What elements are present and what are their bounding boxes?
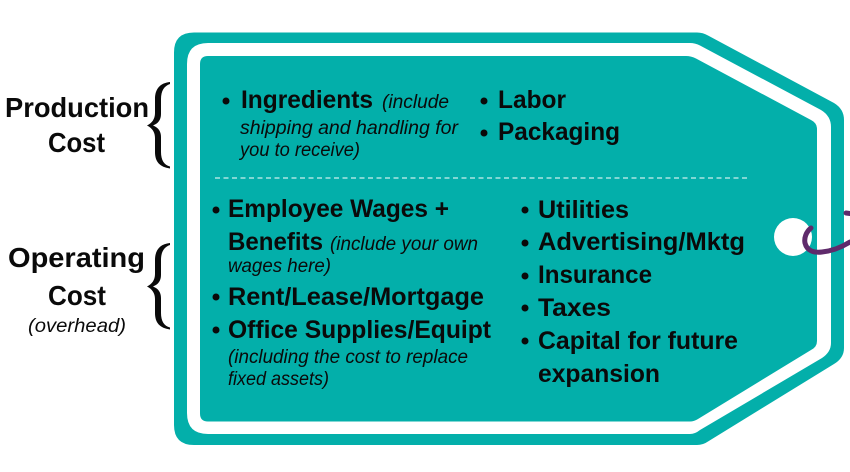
- operating cost list: left column: Office Supplies/Equipt: [228, 316, 492, 344]
- purple string: [805, 213, 850, 252]
- operating cost list: left column: Employee Wages +: [228, 195, 449, 223]
- operating cost list: left column: (include your own: [330, 234, 478, 255]
- operating cost list: left column: Benefits: [228, 228, 323, 256]
- heading: operating cost: Operating: [8, 242, 145, 273]
- operating cost list: left column: wages here): [228, 256, 331, 277]
- heading: operating cost: [8, 242, 145, 337]
- operating cost list: right column: Advertising/Mktg: [538, 228, 745, 256]
- heading: operating cost: Cost: [48, 280, 106, 311]
- heading: production cost: [5, 92, 149, 158]
- brace: production cost: [147, 82, 170, 168]
- heading: production cost: Production: [5, 92, 149, 123]
- operating cost list: right column: Taxes: [538, 294, 611, 322]
- operating cost list: right column: Insurance: [538, 261, 652, 289]
- production cost list: left column: (include: [382, 92, 449, 113]
- heading: production cost: Cost: [48, 127, 105, 158]
- operating cost list: right column: Capital for future: [538, 327, 738, 355]
- production cost list: left column: you to receive): [238, 140, 360, 161]
- production cost list: left column: shipping and handling for: [240, 118, 459, 139]
- production cost list: left column: [222, 86, 459, 161]
- production cost list: right column: [480, 86, 620, 146]
- operating cost list: left column: Rent/Lease/Mortgage: [228, 283, 484, 311]
- operating cost list: right column: Utilities: [538, 196, 629, 224]
- price tag shape: [174, 32, 844, 445]
- tag hole: [774, 218, 812, 256]
- production cost list: left column: Ingredients: [241, 86, 373, 114]
- operating cost list: right column: expansion: [538, 360, 660, 388]
- production cost list: right column: Packaging: [498, 118, 620, 146]
- operating cost list: left column: [212, 195, 492, 390]
- brace: operating cost: [147, 243, 170, 330]
- operating cost list: left column: (including the cost to replace: [228, 347, 468, 368]
- heading: operating cost: (overhead): [28, 316, 126, 337]
- operating cost list: right column: [522, 196, 745, 388]
- production cost list: right column: Labor: [498, 86, 566, 114]
- operating cost list: left column: fixed assets): [228, 369, 329, 390]
